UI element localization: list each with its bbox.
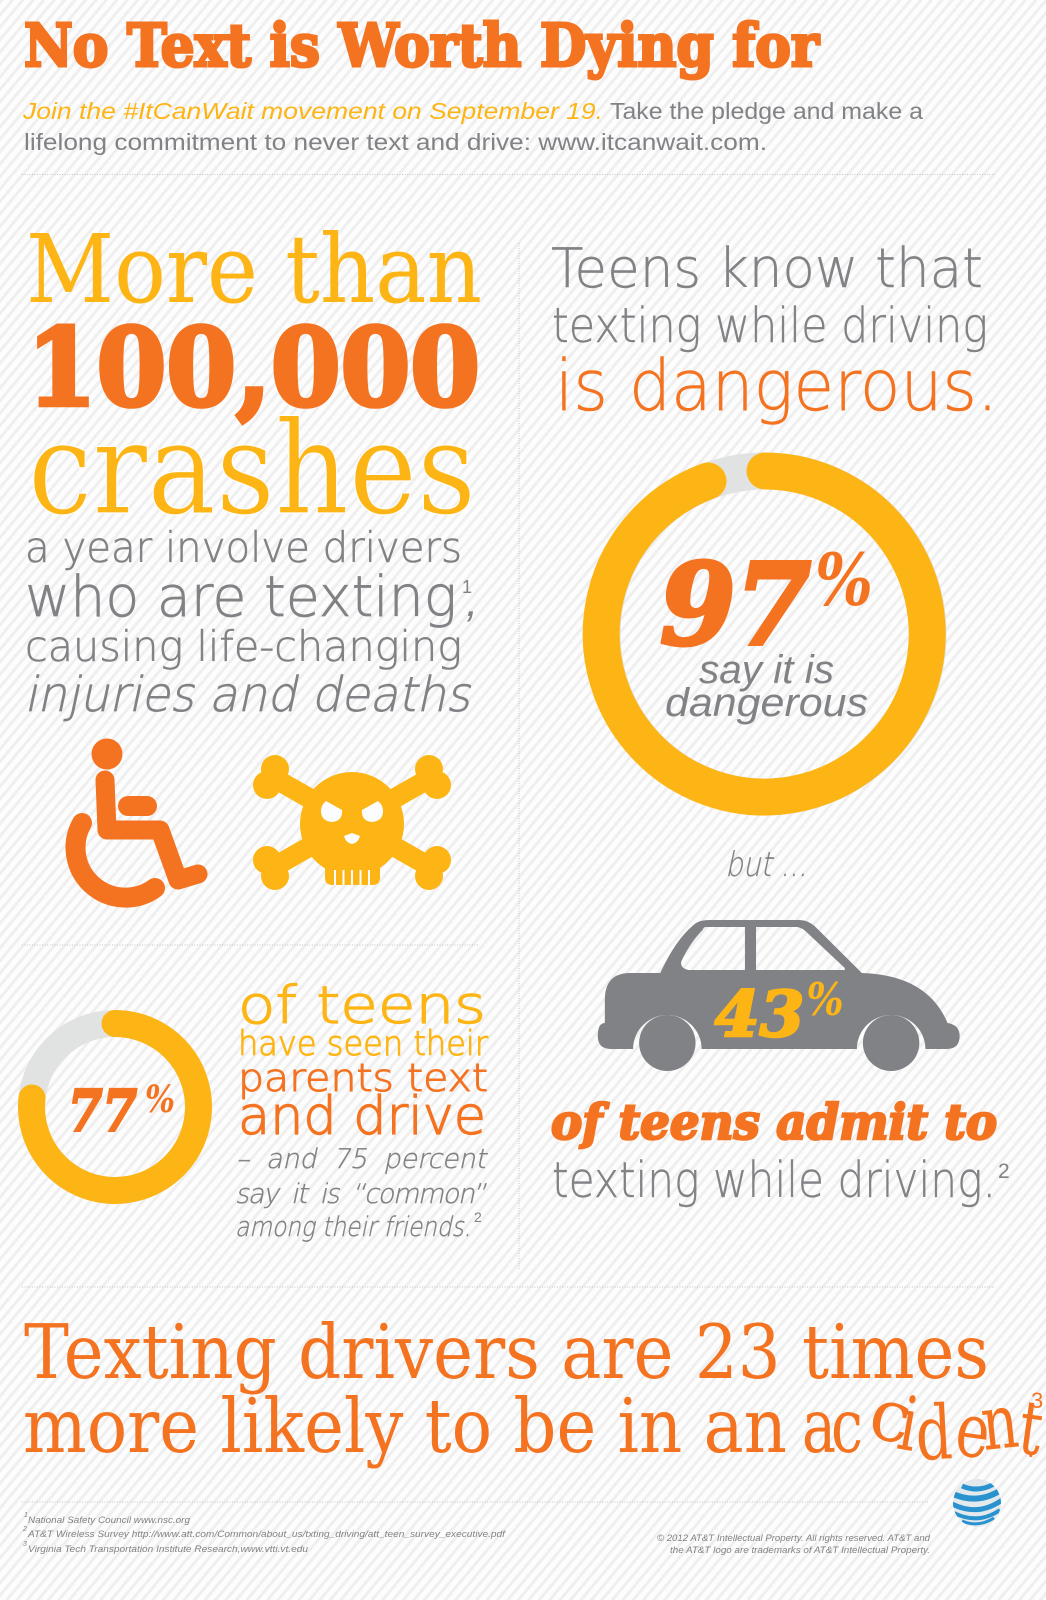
icon: AT&T globe	[952, 1479, 1002, 1527]
callout: 23 times: i	[892, 1379, 925, 1469]
intro text: lifelong commitment to never text and drive: www.itcanwait.com.	[24, 129, 767, 155]
icon: skull and crossbones	[253, 755, 451, 890]
crashes description: ,	[466, 577, 478, 626]
footnotes: National Safety Council www.nsc.org	[28, 1515, 191, 1526]
callout: 23 times	[23, 1308, 1046, 1478]
text: teens admit	[551, 1093, 1010, 1209]
donut chart: 77%: 77	[68, 1078, 137, 1145]
text: teens admit: 2	[998, 1160, 1010, 1183]
crashes description: a year involve drivers	[25, 523, 462, 572]
icon: car with 43%: 43	[715, 977, 804, 1051]
footnotes	[22, 1512, 506, 1555]
icon: car with 43%	[598, 920, 960, 1071]
intro text	[22, 98, 923, 155]
donut chart: 97%: dangerous	[665, 681, 868, 725]
donut chart: 97%: 97	[660, 540, 811, 671]
text: parents text and drive: and drive	[238, 1086, 486, 1147]
heading: teens know: Teens know that	[551, 237, 983, 300]
crashes description: who are texting	[25, 565, 457, 630]
donut chart: 77%: %	[145, 1077, 175, 1121]
crashes description: causing life-changing	[25, 622, 462, 671]
panel: crashes headline: More than	[26, 215, 482, 325]
intro text: Take the pledge and make a	[610, 98, 923, 124]
callout: 23 times: .	[1027, 1435, 1035, 1463]
text: parents text and drive: say it is “common”	[234, 1179, 491, 1210]
callout: 23 times: c	[862, 1370, 919, 1461]
footnotes: 2	[22, 1526, 27, 1533]
callout: 23 times: more likely to be in an	[23, 1382, 787, 1470]
text: teens admit: of teens admit to	[551, 1093, 997, 1151]
copyright: the AT&T logo are trademarks of AT&T Intellectual Property.	[670, 1545, 930, 1556]
copyright	[657, 1533, 931, 1556]
callout: 23 times: e	[950, 1385, 996, 1477]
text: parents text and drive: 2	[474, 1209, 482, 1225]
text: but: but ...	[723, 845, 814, 885]
copyright: © 2012 AT&T Intellectual Property. All rights reserved. AT&T and	[657, 1533, 931, 1544]
donut chart: 97%: %	[815, 537, 873, 622]
text: parents text and drive: parents text	[238, 1056, 488, 1100]
icon: wheelchair	[76, 738, 198, 898]
text: parents text and drive: have seen their	[238, 1024, 488, 1064]
footnotes: 1	[24, 1512, 28, 1519]
text: parents text and drive: among their friends.	[234, 1212, 476, 1243]
callout: 23 times: a	[802, 1382, 836, 1470]
title: No Text is Worth Dying for	[24, 11, 820, 80]
callout: 23 times: d	[913, 1388, 954, 1478]
donut chart: 97%	[601, 471, 928, 797]
crashes description: 1	[462, 577, 472, 597]
crashes description: injuries and deaths	[21, 667, 479, 723]
callout: 23 times: c	[831, 1382, 863, 1470]
intro text: Join the #ItCanWait movement on September 19.	[22, 98, 603, 124]
footnotes: AT&T Wireless Survey http://www.att.com/Common/about_us/txting_driving/att_teen_survey_executive.pdf	[27, 1529, 506, 1540]
footnotes: Virginia Tech Transportation Institute Research,www.vtti.vt.edu	[28, 1544, 309, 1555]
text: parents text and drive: of teens	[238, 976, 486, 1036]
callout: 23 times: 3	[1031, 1388, 1043, 1413]
donut chart: 97%: say it is	[699, 648, 834, 692]
heading: teens know: texting while driving	[552, 298, 988, 354]
footnotes: 3	[23, 1541, 27, 1548]
callout: 23 times: n	[977, 1377, 1022, 1468]
crashes description	[21, 523, 479, 723]
heading: teens know	[551, 237, 998, 427]
panel: crashes headline: 100,000	[27, 306, 480, 431]
heading: teens know: is dangerous.	[555, 345, 998, 427]
panel: crashes headline: crashes	[28, 395, 476, 544]
text: parents text and drive	[234, 976, 491, 1243]
icon: car with 43%: %	[806, 973, 844, 1026]
panel: crashes headline	[26, 215, 482, 544]
donut chart: 77%	[32, 1024, 199, 1190]
text: parents text and drive: – and 75 percent	[235, 1144, 491, 1175]
